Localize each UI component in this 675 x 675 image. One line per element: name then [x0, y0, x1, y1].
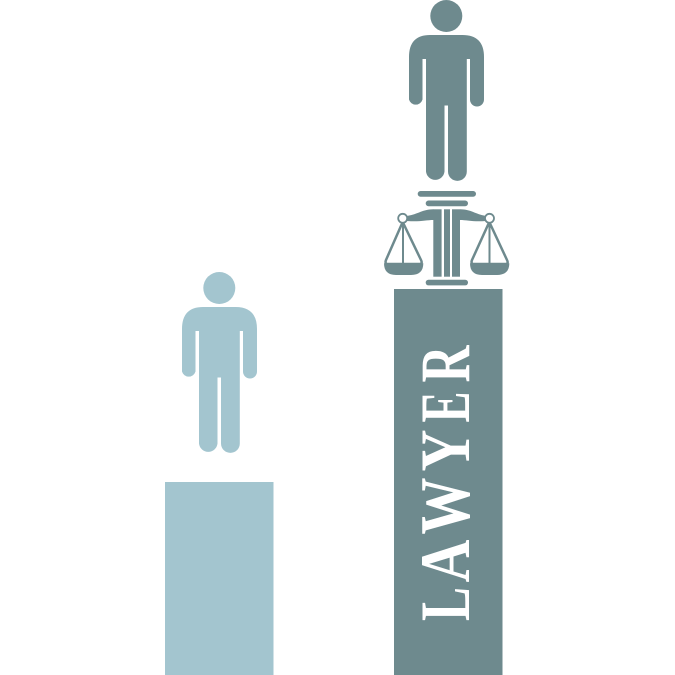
label: LAWYER: E: [407, 392, 485, 422]
icon: scales of justice: [384, 191, 509, 285]
label: LAWYER: A: [407, 540, 485, 582]
panel: dark pedestal with label: [394, 289, 502, 675]
icon: light person: [182, 272, 257, 453]
label: LAWYER: W: [407, 478, 485, 534]
label: LAWYER: [407, 345, 485, 621]
label: LAWYER: Y: [407, 430, 485, 472]
label: LAWYER: L: [407, 587, 485, 621]
panel: light pedestal: [165, 482, 274, 675]
icon: dark person: [409, 0, 484, 181]
label: LAWYER: R: [407, 345, 485, 382]
